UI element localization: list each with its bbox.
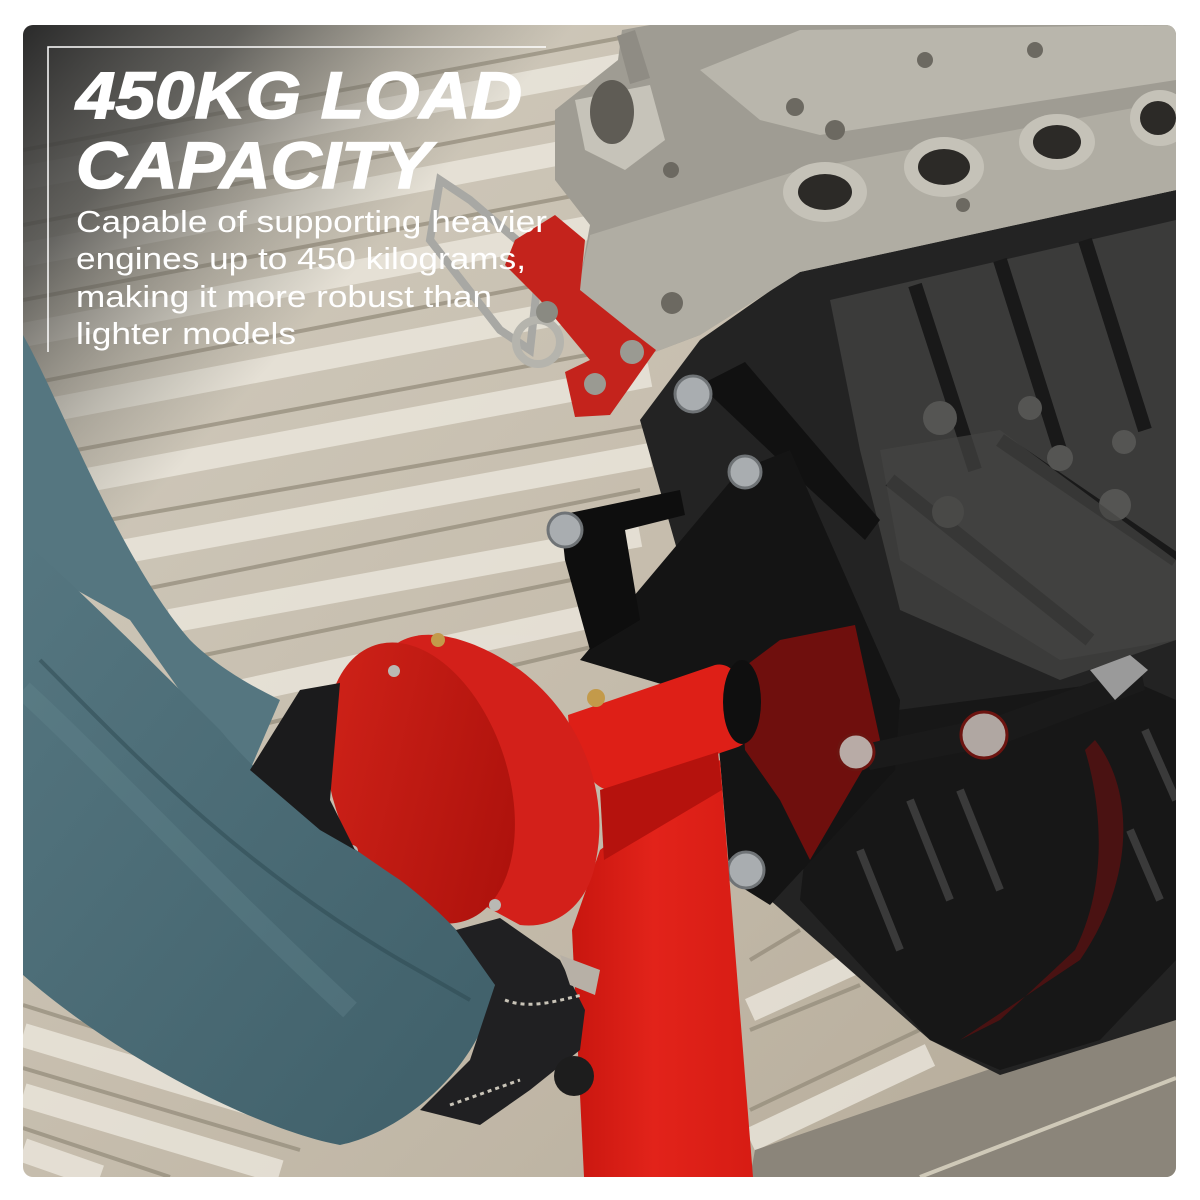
red gearbox drum bbox=[330, 633, 600, 926]
gloved lower hand with crank handle bbox=[420, 918, 600, 1125]
lifting bracket and chain bbox=[430, 180, 656, 417]
description bbox=[76, 204, 547, 351]
floor bbox=[750, 1005, 1176, 1177]
turnbuckle bolt bbox=[838, 655, 1148, 770]
title: 450KG LOAD bbox=[74, 58, 522, 132]
engine block bbox=[640, 190, 1176, 1075]
red hub behind plate bbox=[740, 625, 880, 860]
heading rule bbox=[48, 47, 546, 352]
dark overlay behind heading bbox=[23, 25, 540, 506]
description: Capable of supporting heavier bbox=[76, 204, 547, 239]
gloved upper hand bbox=[250, 683, 355, 850]
description: making it more robust than bbox=[76, 279, 492, 314]
worker arm in sleeve bbox=[23, 335, 495, 1145]
cylinder head bbox=[555, 25, 1190, 352]
description: lighter models bbox=[76, 316, 296, 351]
title: CAPACITY bbox=[76, 128, 436, 202]
red stand post bbox=[568, 660, 761, 1177]
description: engines up to 450 kilograms, bbox=[76, 241, 526, 276]
black mounting plate bbox=[548, 362, 900, 905]
title bbox=[74, 58, 522, 202]
